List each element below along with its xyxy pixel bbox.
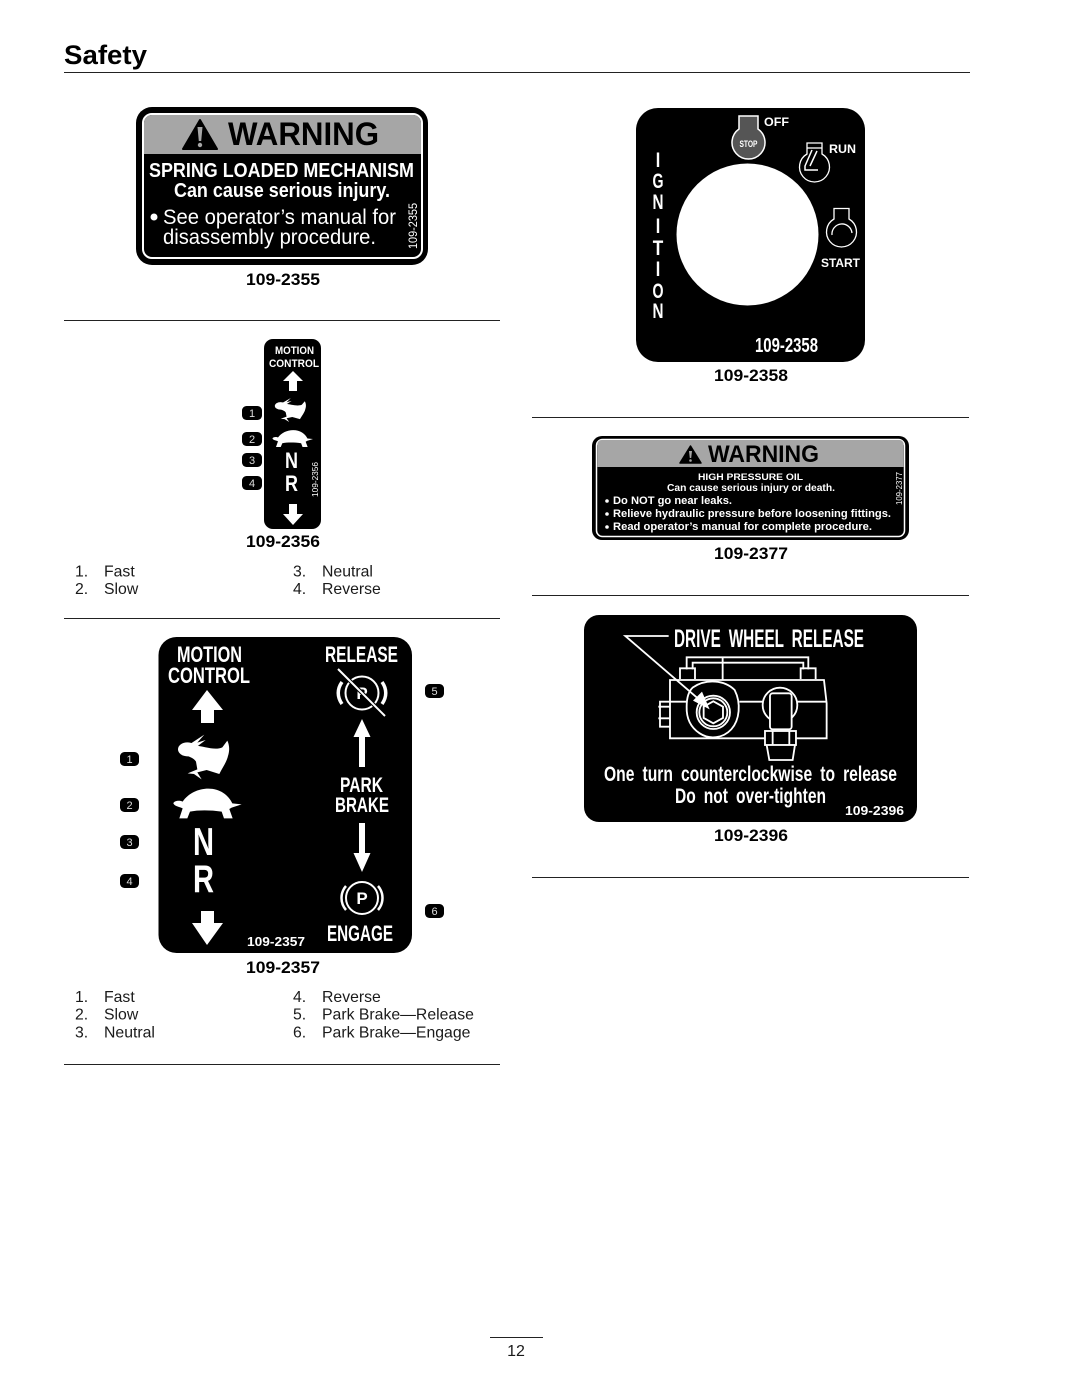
heading: drive wheel release: DRIVE WHEEL RELEASE bbox=[674, 625, 864, 653]
icon: up arrow bbox=[192, 690, 223, 723]
callout badges: 109-2356: 1 bbox=[249, 408, 255, 420]
text: R: R bbox=[285, 471, 298, 496]
heading: motion control: MOTION bbox=[177, 642, 242, 667]
callout badges: 109-2357: 2 bbox=[126, 800, 133, 812]
label: 109-2355: 109-2355 bbox=[246, 270, 320, 289]
text: release: RELEASE bbox=[325, 642, 398, 667]
icon: stop position: STOP bbox=[740, 139, 758, 150]
text: vertical part number: 109-2377 bbox=[894, 472, 904, 505]
text: instructions: One turn counterclockwise to release bbox=[604, 763, 897, 786]
text: bullet list: Read operator’s manual for complete procedure. bbox=[613, 521, 872, 533]
callout badges: 109-2356: 4 bbox=[249, 478, 255, 490]
text: vertical ignition letters: N bbox=[652, 191, 664, 214]
icon: turtle bbox=[272, 430, 313, 447]
icon: rabbit bbox=[178, 735, 229, 779]
text: park brake: BRAKE bbox=[335, 794, 389, 817]
text: vertical ignition letters: T bbox=[653, 237, 663, 260]
panel: decal 109-2356 motion control bbox=[264, 339, 321, 529]
heading: motion control: CONTROL bbox=[168, 663, 250, 688]
page number bbox=[490, 1338, 543, 1360]
icon: turtle bbox=[173, 789, 242, 818]
title: Safety bbox=[64, 40, 147, 70]
panel: decal 109-2355 spring warning bbox=[136, 107, 428, 265]
callout badges: 109-2357: 6 bbox=[431, 906, 438, 918]
heading: motion control: MOTION bbox=[275, 345, 314, 357]
callout badges: 109-2356: 2 bbox=[249, 434, 255, 446]
legend: 109-2357: 4. bbox=[293, 989, 306, 1006]
legend: 109-2357: Park Brake—Release bbox=[322, 1006, 474, 1024]
text: bullet list: Do NOT go near leaks. bbox=[613, 495, 732, 507]
text: R: R bbox=[193, 858, 214, 901]
legend: 109-2357: Reverse bbox=[322, 989, 381, 1006]
heading: motion control: CONTROL bbox=[269, 358, 319, 370]
legend: 109-2356: 2. bbox=[75, 581, 88, 598]
label: 109-2356: 109-2356 bbox=[246, 532, 320, 551]
icon: up arrow bbox=[283, 371, 303, 391]
text: part number: 109-2357 bbox=[247, 934, 305, 949]
icon: rabbit bbox=[275, 398, 306, 422]
legend: 109-2357: 2. bbox=[75, 1006, 88, 1024]
icon: start position bbox=[826, 208, 857, 247]
legend: 109-2356: 1. bbox=[75, 564, 88, 580]
callout badges: 109-2357: 3 bbox=[126, 837, 133, 849]
legend: 109-2357: Park Brake—Engage bbox=[322, 1024, 471, 1042]
legend: 109-2356: Neutral bbox=[322, 564, 373, 580]
text: vertical ignition letters: I bbox=[656, 215, 660, 238]
icon: brake engaged: P bbox=[356, 889, 368, 908]
text: vertical ignition letters bbox=[652, 149, 664, 323]
text: spring loaded mechanism: SPRING LOADED MECHANISM bbox=[149, 160, 414, 182]
text: see manual instruction: disassembly procedure. bbox=[163, 225, 376, 249]
callout badges: 109-2357: 5 bbox=[431, 686, 438, 698]
legend: 109-2357: 5. bbox=[293, 1006, 306, 1024]
callout badges: 109-2357 bbox=[120, 684, 444, 918]
icon: release arrow bbox=[354, 719, 370, 767]
icon: brake released: P bbox=[356, 684, 368, 703]
heading: motion control bbox=[269, 345, 319, 370]
label: 109-2358: 109-2358 bbox=[714, 366, 788, 385]
legend: 109-2357: 3. bbox=[75, 1024, 88, 1042]
text: vertical part number: 109-2355 bbox=[408, 203, 420, 249]
icon: run position bbox=[800, 143, 830, 182]
legend: 109-2356: 4. bbox=[293, 581, 306, 598]
text: vertical ignition letters: I bbox=[656, 149, 660, 172]
pointer arrow bbox=[625, 636, 700, 700]
icon: brake engaged bbox=[342, 882, 382, 914]
panel: decal 109-2357 motion control and park brake bbox=[158, 637, 412, 953]
heading: warning: WARNING bbox=[228, 116, 379, 152]
legend: 109-2357: Fast bbox=[104, 989, 135, 1006]
text: see manual instruction: See operator’s manual for bbox=[163, 205, 396, 229]
text: bullet list: Relieve hydraulic pressure before loosening fittings. bbox=[613, 508, 891, 520]
text: run: RUN bbox=[829, 142, 856, 156]
legend: 109-2357: Neutral bbox=[104, 1024, 155, 1042]
legend: 109-2356: Slow bbox=[104, 581, 139, 598]
legend: 109-2357: 1. bbox=[75, 989, 88, 1006]
text: vertical ignition letters: N bbox=[652, 300, 664, 323]
text: start: START bbox=[821, 256, 861, 270]
panel: decal 109-2396 drive wheel release bbox=[584, 615, 917, 822]
text: part number: 109-2358 bbox=[755, 335, 818, 357]
text: engage: ENGAGE bbox=[327, 921, 393, 946]
text: bullet list bbox=[605, 495, 891, 533]
callout badges: 109-2357: 1 bbox=[126, 754, 133, 766]
diagram: pump valve with pointer arrow bbox=[625, 636, 827, 760]
callout badges: 109-2356: 3 bbox=[249, 455, 255, 467]
text: instructions: Do not over-tighten bbox=[675, 785, 826, 808]
legend: 109-2356: Reverse bbox=[322, 581, 381, 598]
page number: 12 bbox=[507, 1343, 525, 1360]
text: vertical ignition letters: O bbox=[652, 280, 664, 303]
text: vertical ignition letters: I bbox=[656, 258, 660, 281]
legend: 109-2356: Fast bbox=[104, 564, 135, 580]
callout badges: 109-2357: 4 bbox=[126, 876, 133, 888]
icon: stop position bbox=[732, 116, 765, 159]
icon: down arrow bbox=[192, 911, 223, 945]
text: park brake: PARK bbox=[340, 774, 383, 797]
callout badges: 109-2356 bbox=[242, 406, 262, 490]
label: 109-2396: 109-2396 bbox=[714, 826, 788, 845]
key hole bbox=[676, 164, 818, 306]
legend: 109-2357: Slow bbox=[104, 1006, 139, 1024]
text: high pressure oil: HIGH PRESSURE OIL bbox=[698, 472, 803, 483]
label: 109-2377: 109-2377 bbox=[714, 544, 788, 563]
text: N: N bbox=[285, 448, 298, 473]
legend: 109-2356 bbox=[75, 564, 381, 598]
text: see manual instruction bbox=[150, 205, 396, 249]
text: park brake bbox=[335, 774, 389, 817]
text: instructions bbox=[604, 763, 897, 808]
text: can cause serious injury: Can cause serious injury. bbox=[174, 180, 390, 202]
heading: motion control bbox=[168, 642, 250, 688]
legend: 109-2356: 3. bbox=[293, 564, 306, 580]
text: can cause injury or death: Can cause serious injury or death. bbox=[667, 483, 835, 494]
icon: engage arrow bbox=[354, 823, 370, 872]
legend: 109-2357: 6. bbox=[293, 1024, 306, 1042]
icon: brake released bbox=[338, 669, 386, 716]
icon: warning triangle bbox=[183, 120, 217, 149]
text: N: N bbox=[193, 821, 214, 864]
panel: decal 109-2358 ignition bbox=[636, 108, 865, 362]
text: vertical part number: 109-2356 bbox=[310, 462, 320, 497]
icon: warning triangle bbox=[680, 446, 701, 463]
heading: warning: WARNING bbox=[708, 441, 819, 468]
label: 109-2357: 109-2357 bbox=[246, 958, 320, 977]
text: off: OFF bbox=[764, 115, 789, 129]
legend: 109-2357 bbox=[75, 989, 474, 1042]
text: vertical ignition letters: G bbox=[652, 170, 664, 193]
text: part number: 109-2396 bbox=[845, 803, 904, 818]
panel: decal 109-2377 high pressure oil warning bbox=[592, 436, 909, 540]
icon: down arrow bbox=[283, 504, 303, 525]
